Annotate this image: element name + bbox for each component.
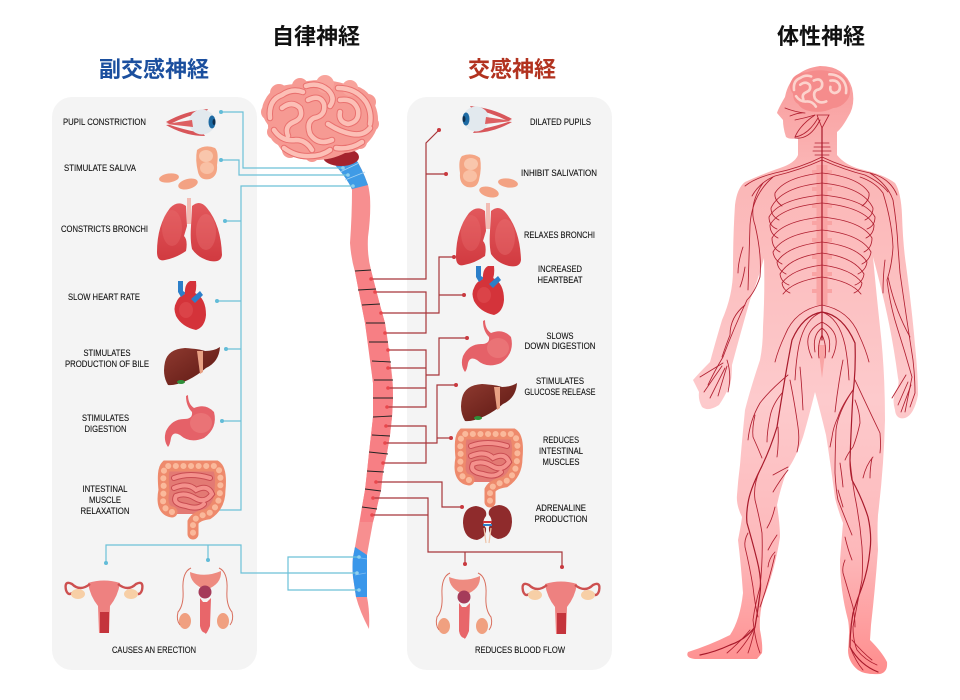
icon: intestines left (163, 466, 220, 534)
nerves: pelvis (775, 305, 869, 380)
labels: parasympathetic effects (61, 117, 196, 656)
spinal column band (816, 165, 828, 305)
heading: parasympathetic: 副交感神経 (99, 57, 209, 82)
labels: parasympathetic effects: PRODUCTION OF BILE (65, 359, 149, 370)
labels: parasympathetic effects: SLOW HEART RATE (68, 292, 140, 303)
labels: sympathetic effects: INCREASED (538, 264, 582, 275)
icon: stomach left (165, 395, 215, 447)
nerves: head and neck (785, 108, 831, 160)
icon: lungs right (456, 203, 521, 266)
labels: parasympathetic effects: PUPIL CONSTRICTION (63, 117, 146, 128)
icon: salivary glands right (459, 154, 519, 199)
title: somatic nerves: 体性神経 (777, 24, 865, 49)
icon: liver left (164, 347, 220, 385)
icon: male reproductive right (436, 573, 492, 639)
icon: liver right (461, 383, 517, 421)
title: autonomic nerves: 自律神経 (272, 24, 360, 49)
spinal cord (335, 158, 393, 629)
labels: sympathetic effects: INHIBIT SALIVATION (521, 168, 597, 179)
labels: sympathetic effects: DILATED PUPILS (530, 117, 591, 128)
nerves: right arm (860, 173, 915, 412)
labels: sympathetic effects: SLOWS (546, 331, 574, 342)
labels: sympathetic effects: REDUCES (543, 435, 579, 446)
body silhouette (687, 66, 918, 674)
nerves: left leg (700, 312, 822, 655)
icon: male reproductive left (177, 568, 233, 634)
icon: female reproductive left (66, 580, 142, 633)
labels: parasympathetic effects: STIMULATE SALIVA (64, 163, 137, 174)
labels: sympathetic effects (475, 117, 597, 656)
icon: intestines right (460, 434, 518, 502)
labels: parasympathetic effects: STIMULATES (84, 348, 130, 359)
icon: female reproductive right (523, 582, 599, 634)
icon: salivary glands left (158, 146, 218, 191)
labels: sympathetic effects: ADRENALINE (536, 503, 586, 514)
labels: parasympathetic effects: INTESTINAL (82, 484, 128, 495)
brain stem (323, 148, 359, 166)
panel: parasympathetic background (52, 97, 257, 670)
labels: parasympathetic effects: DIGESTION (84, 424, 127, 435)
panel: sympathetic background (407, 97, 612, 670)
labels: sympathetic effects: HEARTBEAT (538, 275, 583, 286)
icon: kidneys (463, 505, 512, 543)
labels: sympathetic effects: RELAXES BRONCHI (524, 230, 595, 241)
connectors: sympathetic (369, 128, 564, 569)
labels: parasympathetic effects: STIMULATES (82, 413, 129, 424)
nerves: right leg (822, 312, 880, 672)
labels: sympathetic effects: MUSCLES (542, 457, 580, 468)
labels: sympathetic effects: PRODUCTION (534, 514, 588, 525)
heading: sympathetic: 交感神経 (468, 57, 556, 82)
icon: heart right (472, 266, 504, 315)
spine lower blue section (352, 547, 367, 597)
spine upper blue section (335, 158, 368, 189)
labels: parasympathetic effects: MUSCLE (89, 495, 121, 506)
icon: stomach right (462, 320, 512, 372)
figure brain (790, 70, 850, 112)
labels: sympathetic effects: DOWN DIGESTION (524, 341, 596, 352)
figure: human body with somatic nervous system (687, 66, 918, 674)
icon: heart left (174, 281, 206, 330)
connectors: parasympathetic (104, 110, 361, 592)
labels: sympathetic effects: GLUCOSE RELEASE (524, 387, 596, 398)
brain (261, 75, 379, 162)
labels: parasympathetic effects: RELAXATION (80, 506, 130, 517)
labels: parasympathetic effects: CONSTRICTS BRONCHI (61, 224, 148, 235)
icon: eye right (462, 106, 512, 133)
spine darker middle section (355, 270, 393, 522)
nerves: spine (821, 128, 823, 340)
nerves: shoulders and ribs (745, 157, 897, 294)
labels: sympathetic effects: REDUCES BLOOD FLOW (475, 645, 565, 656)
icon: eye left (166, 109, 216, 136)
labels: sympathetic effects: STIMULATES (536, 376, 584, 387)
nerves: left arm (700, 177, 773, 398)
labels: sympathetic effects: INTESTINAL (539, 446, 583, 457)
icon: lungs left (157, 198, 222, 261)
labels: parasympathetic effects: CAUSES AN ERECTION (112, 645, 196, 656)
